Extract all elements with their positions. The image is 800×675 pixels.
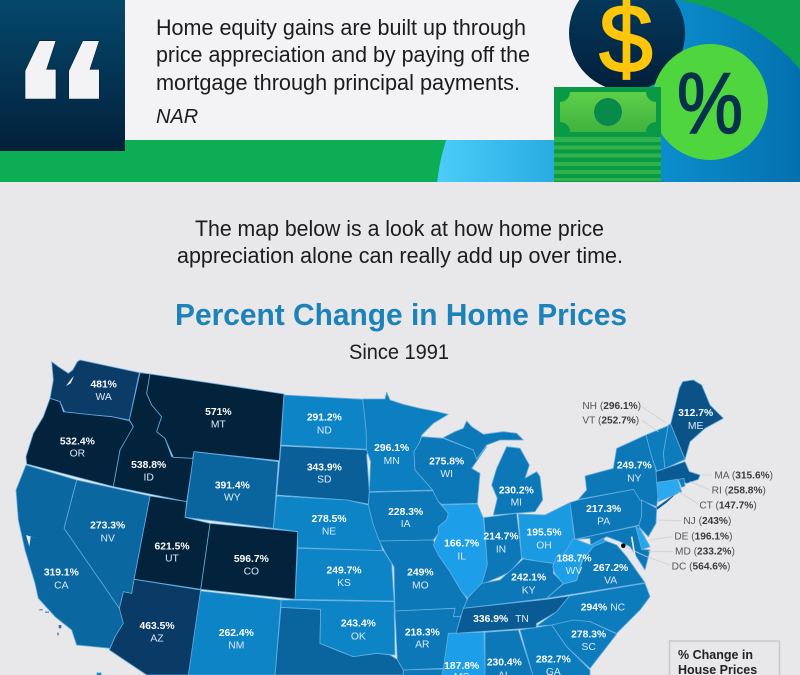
- state: WA: [50, 360, 139, 420]
- state: MI: MI: [511, 498, 522, 509]
- callout labels: NJ (243%): [683, 516, 731, 527]
- state: UT: [134, 496, 210, 589]
- state: MO: 249%: [407, 568, 434, 579]
- icon: dollar coin: [569, 0, 685, 93]
- state: IN: 214.7%: [483, 532, 519, 543]
- state: PA: PA: [597, 516, 610, 527]
- state: MN: [363, 392, 448, 492]
- state: ID: [113, 373, 193, 502]
- state: NC: [537, 583, 650, 633]
- state: ID: ID: [143, 473, 154, 484]
- channel islands: [39, 609, 61, 635]
- state: LA: [403, 669, 443, 675]
- state: NY: 249.7%: [617, 461, 652, 472]
- quote mark box: [0, 0, 125, 151]
- state: NM: [187, 591, 281, 675]
- state: KY: [463, 559, 563, 608]
- state: OR: [26, 398, 133, 487]
- state: MI: [443, 421, 543, 515]
- callout labels: DE (196.1%): [674, 531, 732, 542]
- intro text: [177, 216, 623, 268]
- state: KS: [295, 548, 394, 601]
- state: OH: OH: [536, 540, 552, 551]
- intro text: The map below is a look at how home price: [195, 216, 604, 241]
- state: IL: [433, 504, 487, 598]
- state: NC: NC: [610, 602, 626, 613]
- state: NV: NV: [100, 533, 115, 544]
- state: TN: TN: [515, 614, 529, 625]
- state: UT: UT: [165, 554, 180, 565]
- subheading: Since 1991: [349, 341, 449, 364]
- icon: stack of money: [554, 87, 661, 182]
- quote text: NAR: [156, 106, 198, 128]
- callout labels: NH (296.1%): [582, 401, 641, 412]
- state: AL: [485, 630, 533, 675]
- state: MT: 571%: [205, 407, 232, 418]
- state: SC: [552, 620, 617, 668]
- icon: percent circle: %: [677, 56, 743, 152]
- state: CA: 319.1%: [44, 568, 79, 579]
- callout labels: CT (147.7%): [699, 501, 757, 512]
- state: TN: 336.9%: [473, 614, 508, 625]
- state: SD: SD: [317, 475, 332, 486]
- state: WI: [414, 437, 487, 504]
- state: SC: SC: [581, 642, 596, 653]
- state: GA: 282.7%: [536, 654, 571, 665]
- state: CA: CA: [54, 581, 69, 592]
- state: NH: [663, 424, 685, 468]
- quote text: [156, 15, 530, 128]
- state: WY: 391.4%: [215, 480, 250, 491]
- state: WI: 275.8%: [429, 457, 464, 468]
- state: OH: 195.5%: [526, 527, 562, 538]
- state: SC: 278.3%: [571, 629, 606, 640]
- state: MS: 187.8%: [444, 661, 479, 672]
- state: SD: 343.9%: [307, 462, 342, 473]
- state: IN: [482, 513, 522, 584]
- state: NY: [578, 435, 678, 510]
- state: NJ: [638, 500, 657, 537]
- state: KS: 249.7%: [326, 565, 362, 576]
- callout labels: VT (252.7%): [582, 415, 639, 426]
- heading: Percent Change in Home Prices: [175, 297, 627, 332]
- state: UT: 621.5%: [154, 541, 190, 552]
- state: TN: [456, 596, 569, 633]
- callout labels: MD (233.2%): [675, 546, 735, 557]
- state: AZ: AZ: [150, 634, 164, 645]
- state: NM: NM: [228, 641, 244, 652]
- state: MT: MT: [211, 420, 226, 431]
- state: KS: KS: [337, 578, 351, 589]
- state: WA: 481%: [90, 379, 117, 390]
- state: IL: 166.7%: [444, 539, 479, 550]
- state: CO: CO: [244, 566, 259, 577]
- state: IA: IA: [401, 519, 411, 530]
- state: OR: 532.4%: [60, 437, 95, 448]
- state: IA: 228.3%: [388, 507, 423, 518]
- state: WI: WI: [440, 469, 453, 480]
- state: NY: NY: [627, 474, 642, 485]
- state: AL: 230.4%: [487, 658, 522, 669]
- state: DE: [636, 527, 650, 549]
- state: MN: MN: [384, 456, 400, 467]
- state: WA: WA: [96, 392, 112, 403]
- top right green corner: [680, 0, 800, 68]
- state: ME: ME: [688, 421, 704, 432]
- icon: percent circle: [652, 44, 768, 160]
- state: ND: ND: [317, 425, 332, 436]
- state: MO: MO: [412, 580, 429, 591]
- eastern states: [456, 380, 773, 675]
- state: WV: 188.7%: [556, 553, 592, 564]
- state: OK: 243.4%: [341, 619, 376, 630]
- state: CO: 596.7%: [234, 554, 269, 565]
- state: TX: [275, 607, 403, 675]
- state: NV: [64, 480, 150, 608]
- state: CO: [201, 523, 298, 599]
- state: AZ: [109, 579, 201, 675]
- map: percent change by state: [16, 360, 773, 675]
- state: KY: 242.1%: [511, 573, 546, 584]
- intro text: appreciation alone can really add up over time.: [177, 243, 623, 268]
- green band: [0, 140, 446, 182]
- quote text: mortgage through principal payments.: [156, 70, 520, 95]
- quote panel: [125, 0, 625, 140]
- state: WV: [553, 537, 605, 584]
- state: MI: 230.2%: [499, 486, 534, 497]
- callout labels: RI (258.8%): [712, 486, 766, 497]
- state: NE: [273, 496, 383, 551]
- state: NV: 273.3%: [90, 521, 125, 532]
- state: NE: 278.5%: [311, 514, 347, 525]
- state: VA: [547, 540, 645, 598]
- state: IA: [368, 491, 448, 541]
- state: MA: [656, 462, 700, 483]
- callout labels: [582, 401, 773, 573]
- state: ID: 538.8%: [131, 460, 166, 471]
- state: CA: [16, 465, 123, 648]
- callout labels: DC (564.6%): [672, 562, 730, 573]
- icon: quotation marks: [25, 41, 99, 99]
- state: VA: 267.2%: [593, 563, 628, 574]
- quote text: Home equity gains are built up through: [156, 15, 526, 40]
- state: WY: WY: [224, 493, 241, 504]
- state: PA: 217.3%: [586, 504, 621, 515]
- header banner: [0, 0, 800, 182]
- state: VT: [646, 426, 668, 471]
- legend: [670, 641, 780, 675]
- state: NC: 294%: [581, 602, 607, 613]
- state: SD: [277, 446, 369, 504]
- state: IN: IN: [496, 545, 506, 556]
- state: AR: [395, 608, 461, 670]
- blue arc: [437, 0, 800, 182]
- state: MN: 296.1%: [374, 443, 409, 454]
- DC marker: [621, 543, 626, 548]
- state: MO: [379, 540, 468, 617]
- Hawaii fragment: [97, 673, 101, 675]
- state: VA: VA: [604, 575, 617, 586]
- state: RI: [678, 478, 685, 487]
- state: WY: [185, 452, 278, 528]
- state: OK: [281, 600, 395, 657]
- state: KY: KY: [522, 585, 536, 596]
- state: GA: [520, 625, 590, 675]
- state: ME: [671, 380, 723, 459]
- state: MT: [147, 374, 284, 461]
- state: ME: 312.7%: [678, 408, 713, 419]
- state: MS: [442, 632, 485, 675]
- central states: [363, 392, 543, 675]
- quote text: price appreciation and by paying off the: [156, 42, 530, 67]
- state: AR: AR: [415, 640, 430, 651]
- legend: % Change in: [678, 648, 753, 662]
- state: CT: [657, 479, 682, 502]
- state: OK: OK: [351, 631, 366, 642]
- western states: [16, 360, 403, 675]
- callout labels: MA (315.6%): [714, 471, 773, 482]
- state: MD: [575, 526, 650, 570]
- callout lines: [625, 407, 712, 565]
- state: IL: IL: [457, 551, 466, 562]
- state: ND: 291.2%: [307, 413, 342, 424]
- state: NM: 262.4%: [219, 628, 254, 639]
- state: PA: [570, 489, 642, 539]
- state: AZ: 463.5%: [139, 621, 175, 632]
- state: AR: 218.3%: [405, 627, 440, 638]
- state: NE: NE: [322, 527, 336, 538]
- state: WV: WV: [566, 566, 582, 577]
- state: OH: [518, 503, 575, 563]
- state: OR: OR: [70, 449, 85, 460]
- state: ND: [281, 395, 368, 449]
